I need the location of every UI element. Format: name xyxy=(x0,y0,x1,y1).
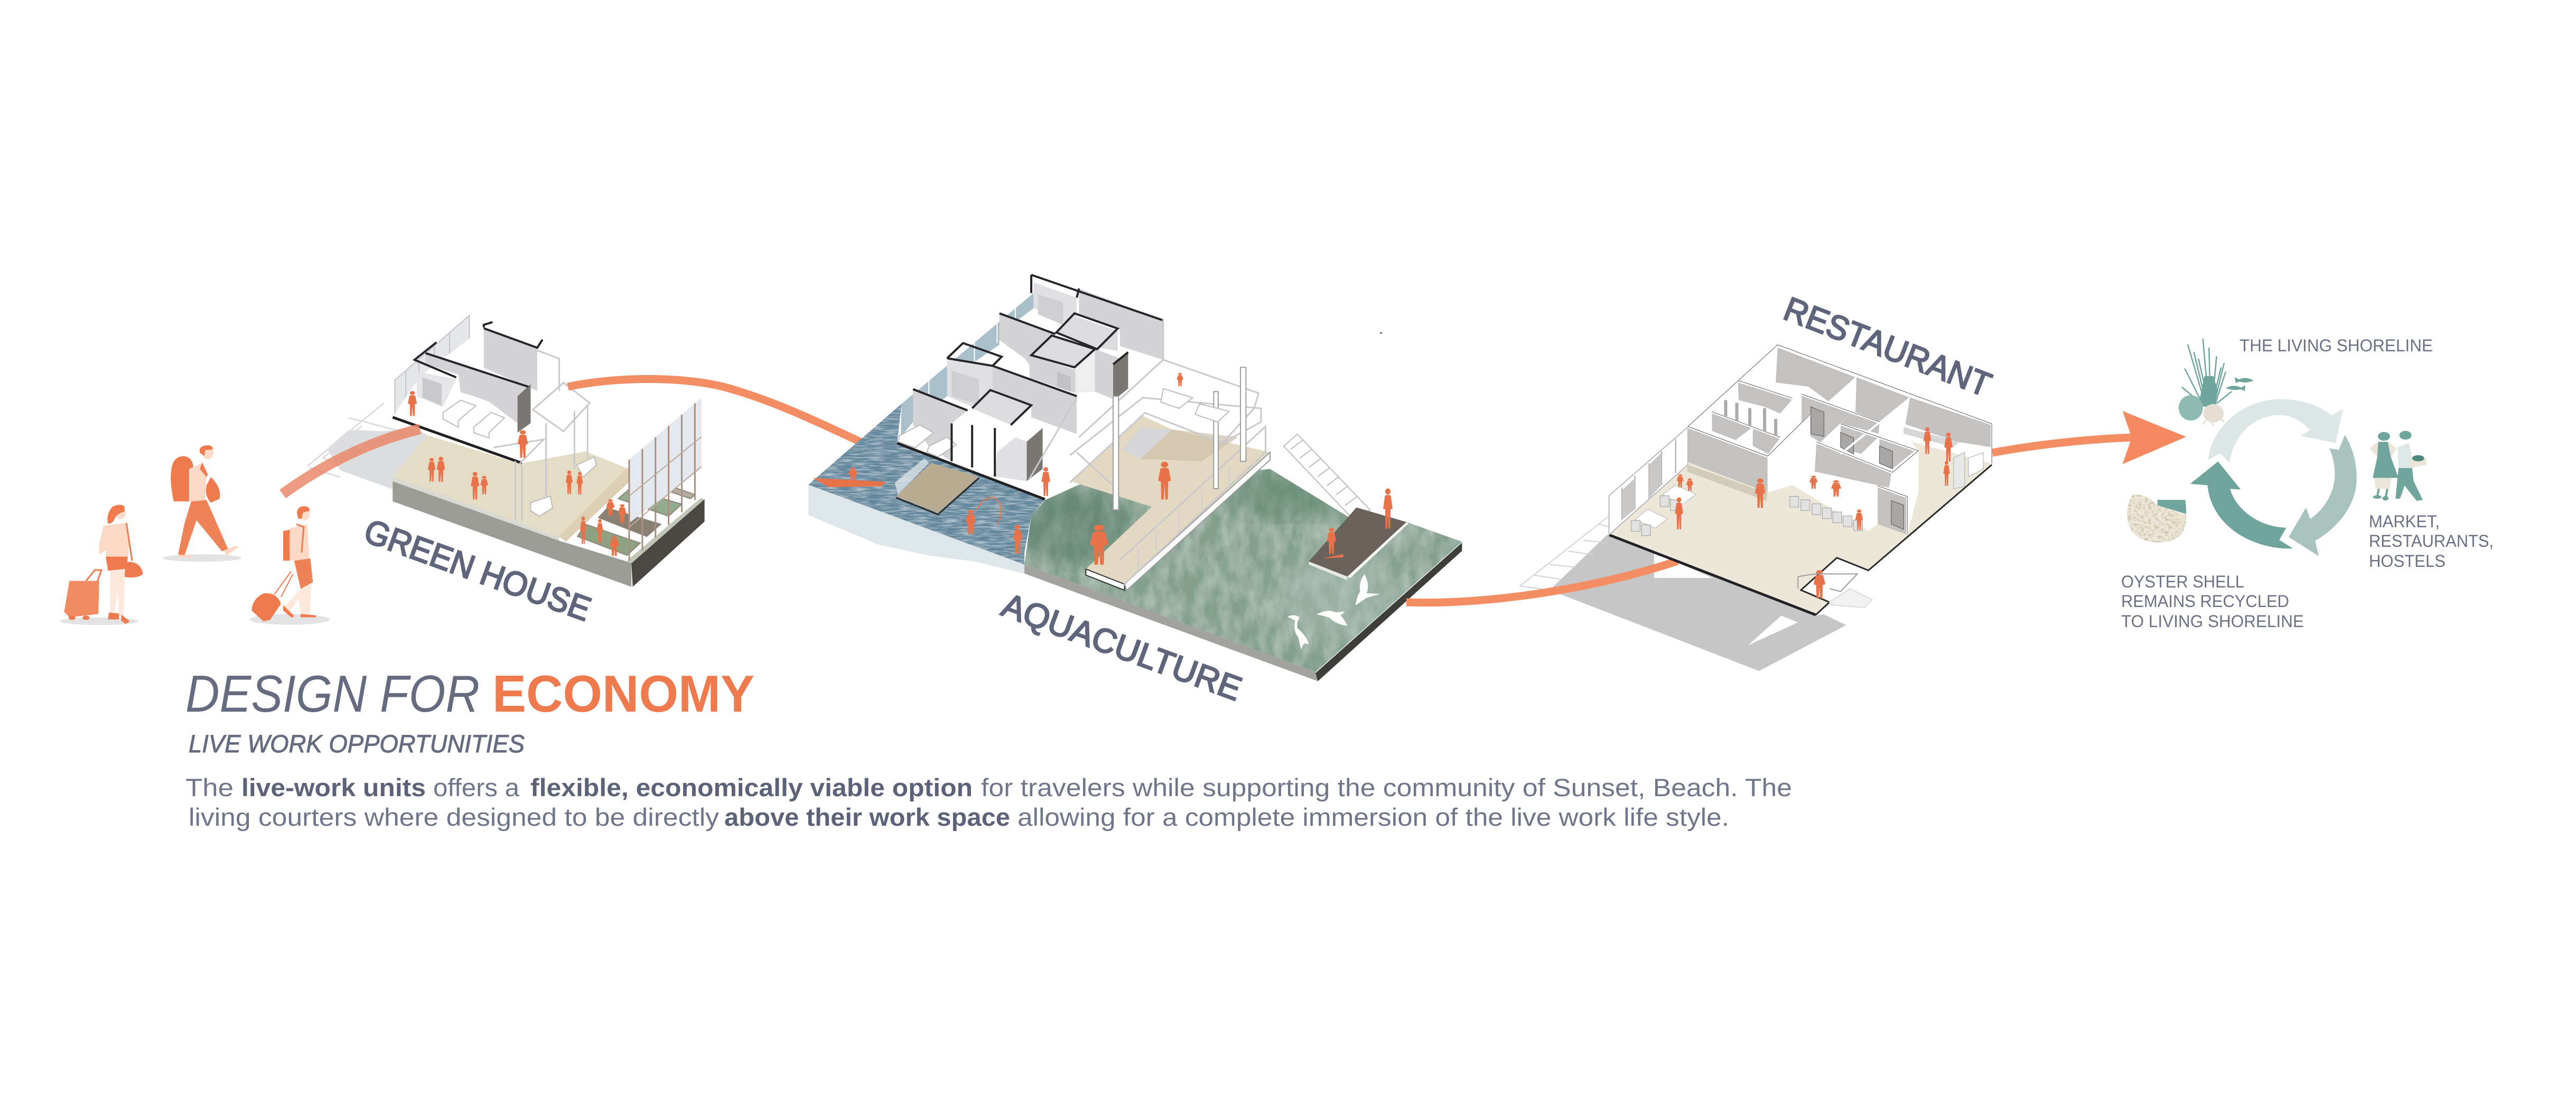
panel: travelers and green house xyxy=(60,315,705,625)
label: market, restaurants, hostels: MARKET, xyxy=(2369,512,2440,531)
body text: for travelers while supporting the community of Sunset, Beach. The xyxy=(981,773,1792,801)
traveler: hiker with backpack xyxy=(163,445,241,562)
body text: offers a xyxy=(433,773,520,801)
boardwalk xyxy=(1070,398,1270,590)
icon: oyster shell pile xyxy=(2127,494,2186,543)
aquaculture people xyxy=(813,373,1393,565)
label: green house: GREEN HOUSE xyxy=(359,511,596,628)
arrow: travelers to green house xyxy=(283,429,420,494)
stray dot xyxy=(1380,332,1382,334)
body text: flexible, economically viable option xyxy=(530,773,973,801)
upper live-work unit xyxy=(393,315,596,520)
cycle arrow: oyster shell to living shoreline xyxy=(2190,462,2293,548)
arrow: restaurant to living shoreline xyxy=(1992,411,2186,464)
label: oyster shell remains recycled xyxy=(2121,572,2304,631)
label: aquaculture: AQUACULTURE xyxy=(997,586,1247,708)
building shadow xyxy=(307,403,432,489)
label: market, restaurants, hostels: HOSTELS xyxy=(2369,552,2446,571)
restaurant floor xyxy=(1609,439,1992,615)
lower dock xyxy=(895,459,979,515)
arrow: aquaculture to restaurant xyxy=(1406,561,1677,603)
body text: The xyxy=(185,773,234,801)
cycle arrow: living shoreline to market xyxy=(2208,399,2343,463)
label: oyster shell remains recycled: OYSTER SHELL xyxy=(2121,572,2244,591)
water surface xyxy=(808,404,1045,564)
label: market, restaurants, hostels: RESTAURANTS, xyxy=(2369,531,2494,550)
white herons xyxy=(1287,574,1380,649)
label: the living shoreline: THE LIVING SHORELINE xyxy=(2239,336,2433,355)
panel: restaurant xyxy=(1609,345,1992,615)
green house base xyxy=(393,435,705,587)
label: oyster shell remains recycled: REMAINS RECYCLED xyxy=(2121,592,2289,611)
title: DESIGN FOR xyxy=(185,665,480,723)
marsh ground xyxy=(1015,469,1462,681)
living unit white slab xyxy=(897,275,1259,499)
body text: live-work units xyxy=(241,773,426,801)
title xyxy=(185,665,754,723)
label: oyster shell remains recycled: TO LIVING SHORELINE xyxy=(2121,612,2304,631)
body text: living courters where designed to be directly xyxy=(189,803,720,831)
traveler: man with rolling bag xyxy=(249,506,330,625)
restaurant walls xyxy=(1687,345,1992,535)
stairs xyxy=(1284,434,1370,520)
planters xyxy=(577,477,695,555)
subtitle: LIVE WORK OPPORTUNITIES xyxy=(189,730,525,758)
aquaculture living units xyxy=(897,275,1259,510)
water cross section xyxy=(808,484,1024,574)
label: restaurant: RESTAURANT xyxy=(1779,290,1996,404)
body text xyxy=(185,773,1792,831)
panel: circular economy cycle xyxy=(2127,339,2426,556)
arrow: green house to aquaculture xyxy=(568,379,862,443)
cycle arrow: market to oyster shell xyxy=(2289,435,2357,556)
title: ECONOMY xyxy=(492,665,754,723)
body text: allowing for a complete immersion of the live work life style. xyxy=(1018,803,1729,831)
restaurant furniture xyxy=(1631,427,1983,536)
icon: market vendors xyxy=(2369,431,2426,501)
restaurant ground shadow xyxy=(1520,516,1846,671)
green house trellis glass wall xyxy=(629,398,702,561)
restaurant people xyxy=(1675,427,1953,599)
panel: aquaculture xyxy=(808,275,1462,681)
icon: marsh grass, fish and crab xyxy=(2179,339,2254,426)
entry stair xyxy=(1798,574,1872,608)
wood bench deck xyxy=(1309,508,1408,580)
label: market, restaurants, hostels xyxy=(2369,512,2494,571)
glass street facade xyxy=(1609,427,1688,535)
traveler: woman with suitcase xyxy=(60,505,143,625)
green house people xyxy=(408,391,627,556)
body text: above their work space xyxy=(724,803,1010,831)
